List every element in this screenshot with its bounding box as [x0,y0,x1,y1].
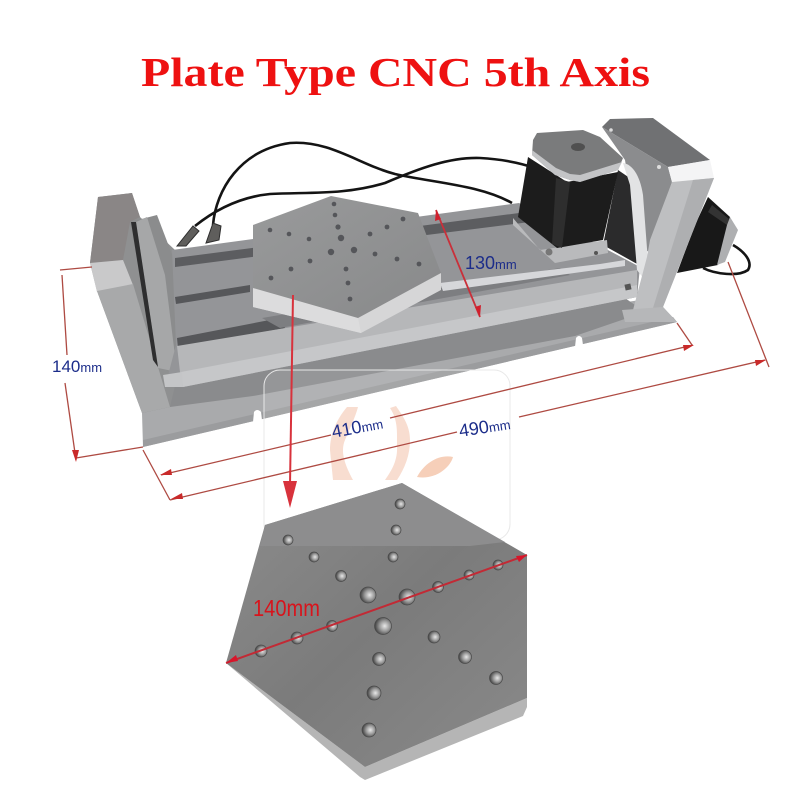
right column [622,160,714,322]
cables [195,143,750,274]
left end disc [90,193,178,413]
plate holes [255,499,503,737]
stepper motor [513,130,623,263]
right bracket back block [602,118,710,270]
140mm plate dimension line [226,555,527,663]
title: Plate Type CNC 5th Axis [141,49,650,95]
label: 410mm: 410mm [330,412,385,442]
label: 140mm plate: 140mm [253,595,320,621]
aluminium rail [163,203,640,387]
arrow: 130mm width [435,210,481,317]
arrowheads [72,345,766,499]
label: 140mm height: 140mm [52,357,102,376]
hexagonal plate [253,196,441,333]
second stepper motor [677,197,738,273]
label: 130mm: 130mm [465,253,517,273]
zoomed hexagon plate [226,483,527,780]
arrow: plate detail [283,295,297,508]
watermark [264,370,510,540]
machine assembly [90,118,750,447]
base notches [253,410,262,422]
dimension lines [60,262,769,500]
connectors [177,223,221,246]
label: 490mm: 490mm [457,413,512,441]
base plate [142,298,677,447]
